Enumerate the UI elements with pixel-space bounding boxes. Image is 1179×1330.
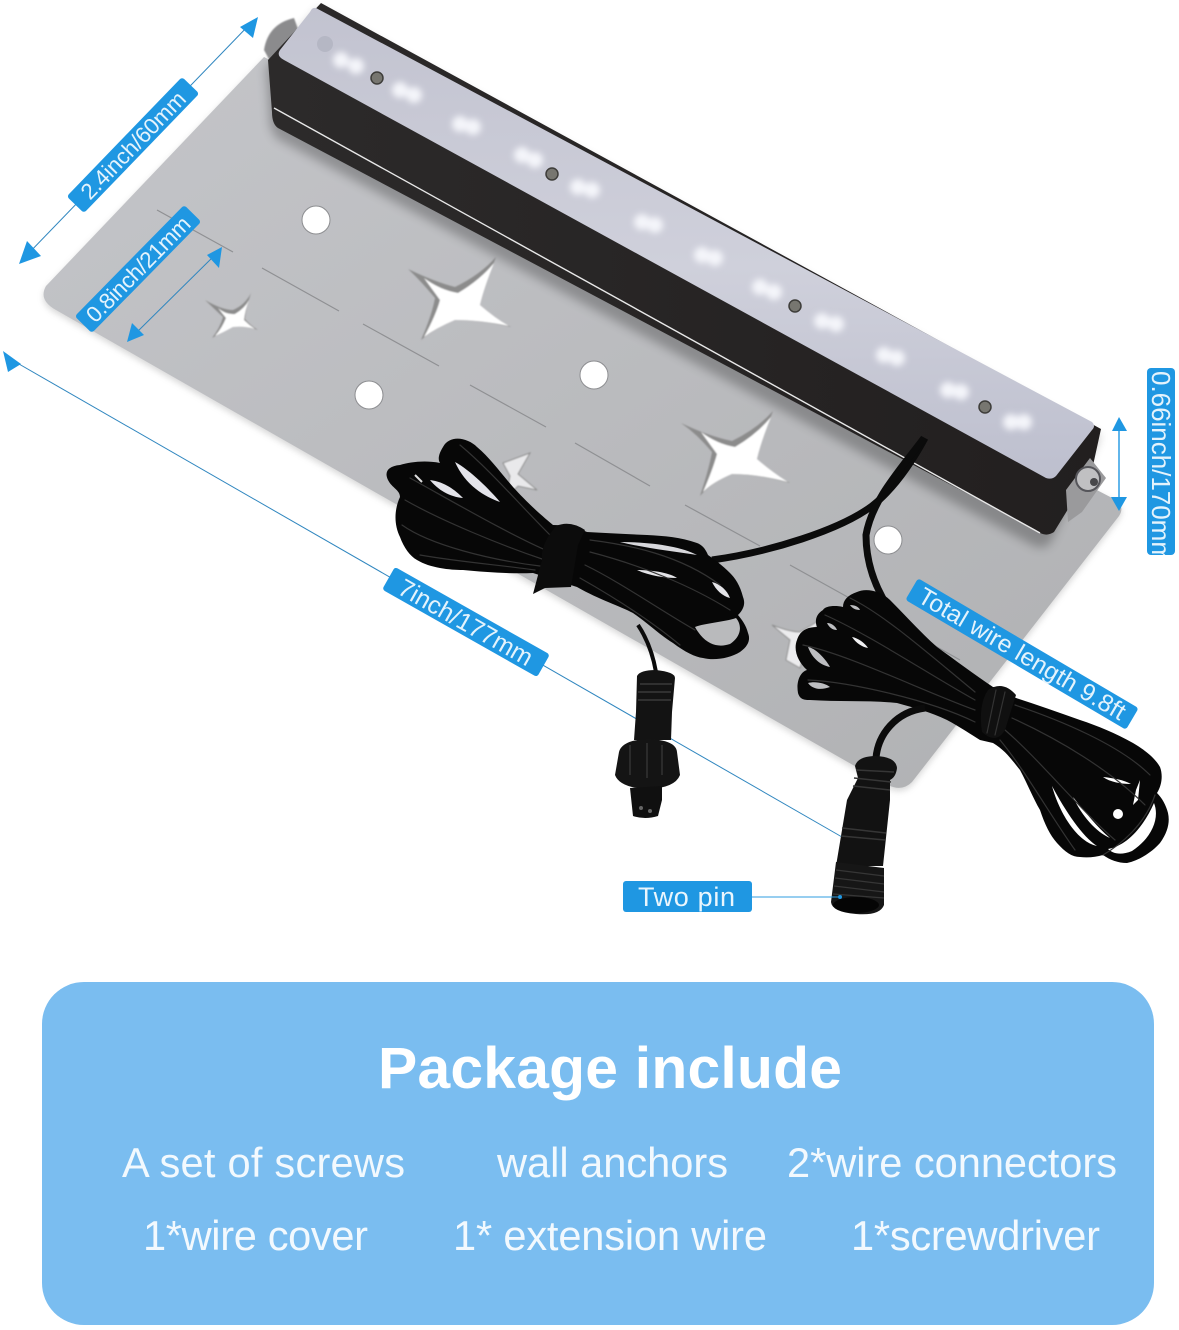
left end bolt [264, 18, 302, 72]
strand highlights [803, 598, 1155, 855]
plate star cut-outs [205, 257, 820, 668]
LED light bar [264, 3, 1106, 548]
dimension: 7 inch line [3, 351, 842, 837]
strand highlights [402, 445, 730, 645]
label: 2.4 inch width dimension [19, 17, 258, 264]
plate slits [157, 210, 960, 660]
label: two pin: Two pin [638, 882, 735, 912]
sensor dot [317, 36, 333, 52]
label: 0.8 inch dimension [75, 205, 222, 342]
diffuser face [279, 8, 1094, 479]
wire to connector [876, 708, 925, 758]
gaps between strands [808, 605, 1156, 854]
label: 7 inch length: 7inch/177mm [393, 574, 538, 672]
item: wire cover: 1*wire cover [143, 1212, 368, 1259]
gaps between strands [415, 462, 740, 646]
panel: product photo [3, 3, 1169, 914]
right end bolt [1066, 458, 1106, 522]
connector: three-hole plug [615, 625, 680, 818]
metal mounting plate [44, 57, 1121, 791]
white edge line [274, 108, 1040, 533]
item: wire connectors: 2*wire connectors [787, 1139, 1117, 1186]
item: screws: A set of screws [122, 1139, 405, 1186]
label: 2.4 inch width dimension: 2.4inch/60mm [76, 86, 191, 204]
heading: Package include [378, 1036, 842, 1101]
LED glow spots [333, 52, 1032, 430]
label: 0.66 inch height dimension: 0.66inch/170mm [1146, 371, 1176, 563]
coil of wire, right [796, 438, 1169, 863]
item: wall anchors: wall anchors [496, 1139, 728, 1186]
cable tie [533, 524, 585, 594]
item: screwdriver: 1*screwdriver [851, 1212, 1100, 1259]
cable tie [981, 686, 1016, 738]
label: two pin [623, 881, 842, 912]
connector: two-pin plug [831, 756, 897, 914]
label: 0.8 inch dimension: 0.8inch/21mm [81, 211, 196, 327]
face screws [371, 72, 991, 413]
panel: package contents [42, 982, 1154, 1325]
label: 0.66 inch height dimension [1111, 368, 1176, 563]
coil of wire, left [386, 438, 925, 659]
label: total wire length: Total wire length 9.8ft [913, 583, 1130, 726]
plate holes [302, 206, 902, 554]
item: extension wire: 1* extension wire [453, 1212, 767, 1259]
